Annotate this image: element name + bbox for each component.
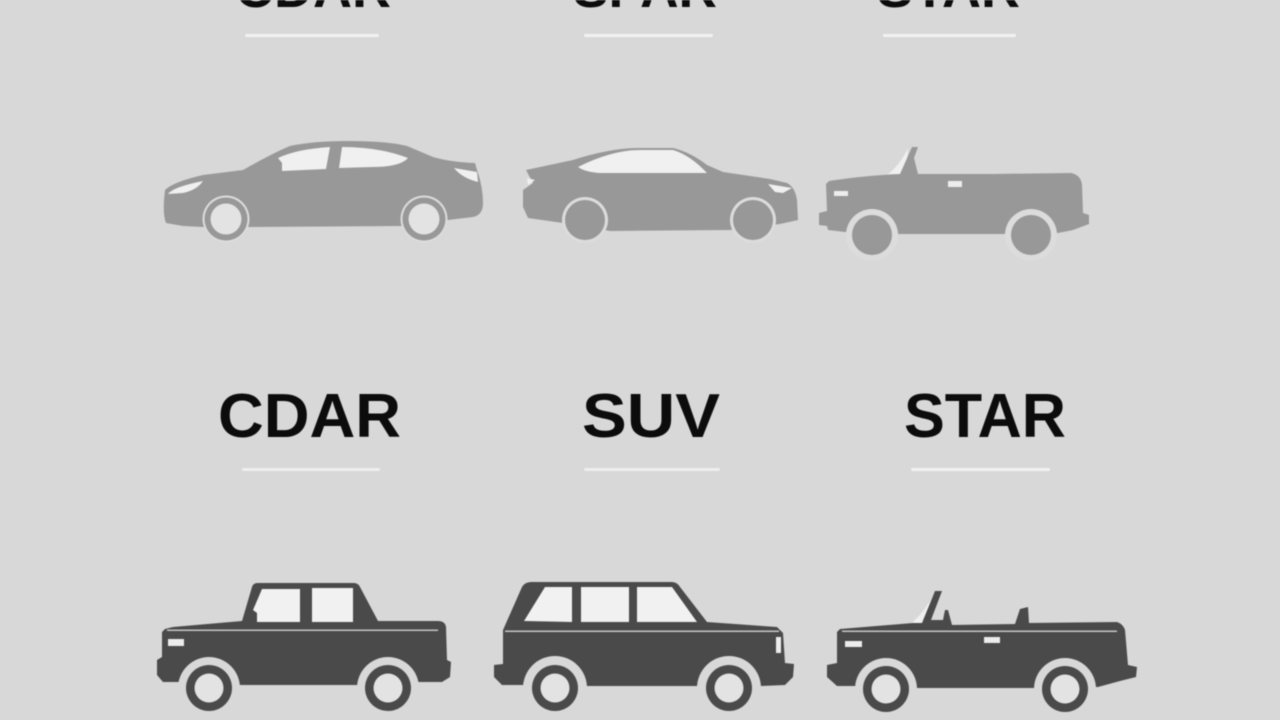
underline: CDAR	[242, 468, 380, 471]
icon: dark convertible	[827, 591, 1137, 720]
icon: dark sedan	[157, 583, 451, 719]
underline: top STAR	[883, 34, 1016, 37]
heading: STAR: STAR	[904, 382, 1066, 451]
icon: dark SUV	[494, 582, 794, 720]
icon: grey sedan	[164, 141, 483, 242]
underline: STAR	[911, 468, 1050, 471]
heading: CDAR: CDAR	[218, 382, 401, 451]
heading: SUV: SUV	[582, 382, 720, 451]
underline: SUV	[584, 468, 720, 471]
icon: grey fastback sedan	[523, 148, 798, 243]
icon: grey convertible	[819, 147, 1089, 261]
underline: top CDAR	[245, 34, 379, 37]
underline: top SPAR	[584, 34, 713, 37]
